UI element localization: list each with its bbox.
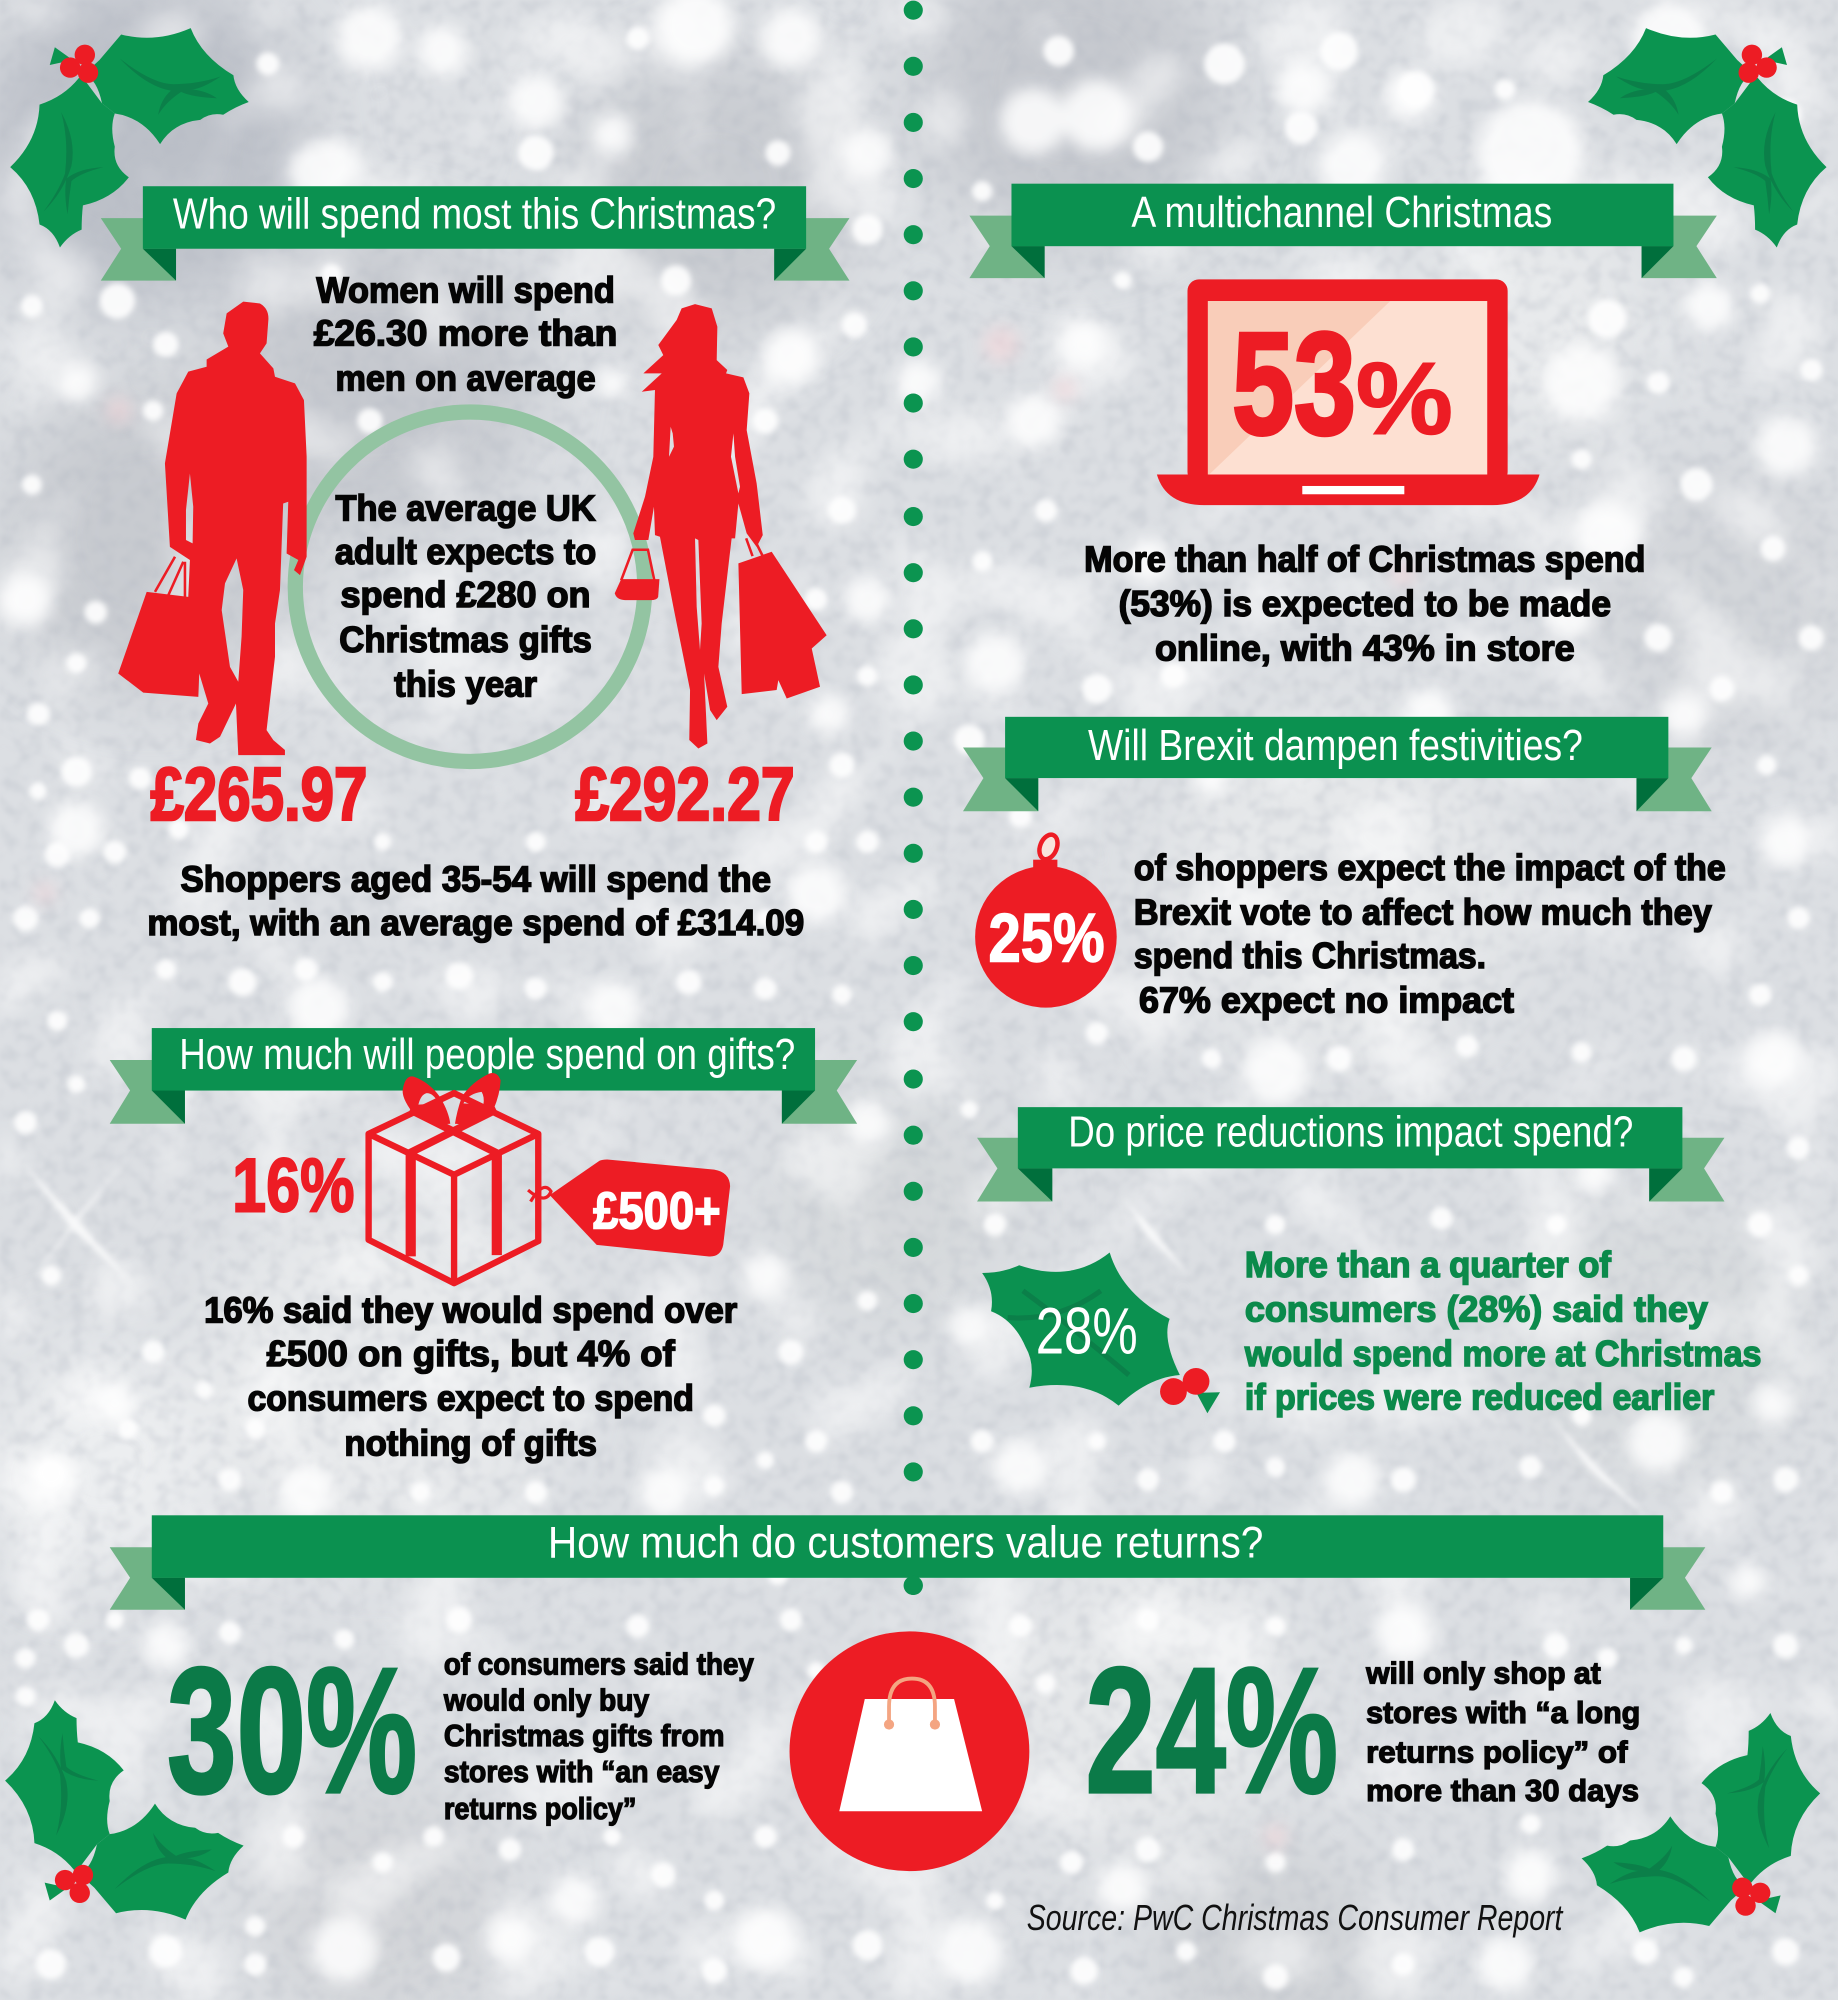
text: Brexit impact: 67% expect no impact bbox=[1139, 981, 1514, 1021]
heading banner: multichannel bbox=[969, 184, 1717, 278]
icon: laptop with 53% bbox=[1157, 279, 1540, 505]
icon: woman silhouette with bags bbox=[615, 304, 827, 748]
text: price reductions in green: if prices were reduced earlier bbox=[1245, 1377, 1714, 1417]
icon: holly leaf with 28% bbox=[982, 1253, 1220, 1413]
text: 16% said they would spend: nothing of gifts bbox=[344, 1423, 597, 1463]
text: long returns policy: more than 30 days bbox=[1366, 1774, 1639, 1808]
text: Brexit impact: Brexit vote to affect how much they bbox=[1134, 893, 1712, 933]
text: more than half online: online, with 43% in store bbox=[1155, 629, 1575, 669]
text: easy returns policy: returns policy” bbox=[444, 1792, 636, 1826]
icon: price tag: £500+ bbox=[593, 1182, 721, 1240]
icon: holly top left bbox=[10, 28, 249, 247]
text: women will spend more: men on average bbox=[335, 358, 596, 398]
dot below returns banner bbox=[904, 1576, 923, 1595]
text: women will spend more: £26.30 more than bbox=[314, 314, 617, 354]
icon: holly leaf with 28%: 28% bbox=[1036, 1294, 1138, 1368]
text: easy returns policy: would only buy bbox=[443, 1683, 649, 1717]
text: long returns policy: stores with “a long bbox=[1366, 1696, 1640, 1730]
icon: price tag bbox=[528, 1159, 730, 1256]
icon: laptop with 53%: 53 bbox=[1232, 302, 1356, 465]
heading banner: multichannel: A multichannel Christmas bbox=[1131, 189, 1552, 237]
text: 16% said they would spend: consumers expect to spend bbox=[247, 1379, 694, 1419]
text: women will spend more: Women will spend bbox=[316, 270, 615, 310]
icon: holly bottom right bbox=[1582, 1713, 1820, 1932]
text: price reductions in green bbox=[1244, 1245, 1761, 1417]
text: easy returns policy: stores with “an easy bbox=[444, 1755, 719, 1789]
heading banner: who will spend most bbox=[101, 186, 849, 281]
text: shoppers aged 35-54: most, with an average spend of £314.09 bbox=[147, 903, 804, 943]
text: average UK adult bbox=[335, 488, 596, 704]
icon: bauble with 25% bbox=[975, 832, 1117, 1008]
text: average UK adult: Christmas gifts bbox=[339, 620, 592, 660]
text: 16% said they would spend: 16% said they would spend over bbox=[204, 1291, 737, 1331]
text: average UK adult: The average UK bbox=[335, 488, 596, 528]
heading banner: price reductions: Do price reductions impact spend? bbox=[1068, 1109, 1633, 1157]
text: average UK adult: adult expects to bbox=[335, 532, 596, 572]
text: Brexit impact: of shoppers expect the impact of the bbox=[1134, 848, 1726, 888]
stat: 16%: 16% bbox=[232, 1144, 355, 1229]
heading banner: price reductions bbox=[977, 1107, 1724, 1202]
heading banner: Brexit: Will Brexit dampen festivities? bbox=[1088, 722, 1583, 770]
icon: man silhouette with bag bbox=[118, 302, 307, 755]
dotted divider bbox=[904, 1, 923, 1595]
text: Brexit impact bbox=[1134, 848, 1726, 1021]
text: average UK adult: spend £280 on bbox=[341, 575, 591, 615]
women's spend figure: £292.27 bbox=[575, 752, 795, 836]
text: Brexit impact: spend this Christmas. bbox=[1134, 936, 1486, 976]
icon: bauble with 25%: 25% bbox=[989, 900, 1105, 977]
heading banner: who will spend most: Who will spend most this Christmas? bbox=[173, 190, 776, 238]
text: price reductions in green: would spend more at Christmas bbox=[1244, 1334, 1761, 1374]
text: easy returns policy bbox=[443, 1648, 754, 1826]
text: shoppers aged 35-54 bbox=[147, 860, 804, 943]
source line: Source: PwC Christmas Consumer Report bbox=[1027, 1898, 1564, 1938]
icon: holly bottom left bbox=[5, 1700, 244, 1920]
text: long returns policy: will only shop at bbox=[1365, 1657, 1601, 1691]
men's spend figure: £265.97 bbox=[151, 752, 367, 836]
heading banner: returns: How much do customers value returns? bbox=[548, 1518, 1263, 1567]
stat: 24%: 24% bbox=[1085, 1630, 1338, 1830]
text: 16% said they would spend bbox=[204, 1291, 737, 1463]
text: shoppers aged 35-54: Shoppers aged 35-54 will spend the bbox=[180, 860, 771, 900]
text: easy returns policy: Christmas gifts from bbox=[444, 1719, 724, 1753]
text: price reductions in green: More than a quarter of bbox=[1245, 1245, 1611, 1285]
heading banner: spend on gifts bbox=[110, 1028, 857, 1124]
text: long returns policy: returns policy” of bbox=[1366, 1736, 1628, 1770]
text: more than half online bbox=[1084, 539, 1645, 669]
icon: holly top right bbox=[1588, 28, 1827, 247]
text: easy returns policy: of consumers said they bbox=[444, 1648, 754, 1682]
icon: shopping bag in red circle bbox=[790, 1631, 1029, 1871]
icon: gift box bbox=[369, 1073, 538, 1283]
text: women will spend more bbox=[314, 270, 617, 398]
heading banner: spend on gifts: How much will people spend on gifts? bbox=[179, 1031, 795, 1079]
text: long returns policy bbox=[1365, 1657, 1640, 1808]
heading banner: Brexit bbox=[963, 717, 1712, 811]
icon: laptop with 53%: % bbox=[1356, 342, 1453, 456]
text: price reductions in green: consumers (28%) said they bbox=[1245, 1289, 1708, 1329]
heading banner: returns bbox=[110, 1515, 1705, 1610]
text: more than half online: More than half of Christmas spend bbox=[1084, 539, 1645, 579]
text: 16% said they would spend: £500 on gifts, but 4% of bbox=[267, 1334, 675, 1374]
ring around average spend bbox=[295, 412, 645, 761]
stat: 30%: 30% bbox=[167, 1630, 417, 1830]
text: average UK adult: this year bbox=[394, 664, 537, 704]
text: more than half online: (53%) is expected to be made bbox=[1119, 584, 1611, 624]
